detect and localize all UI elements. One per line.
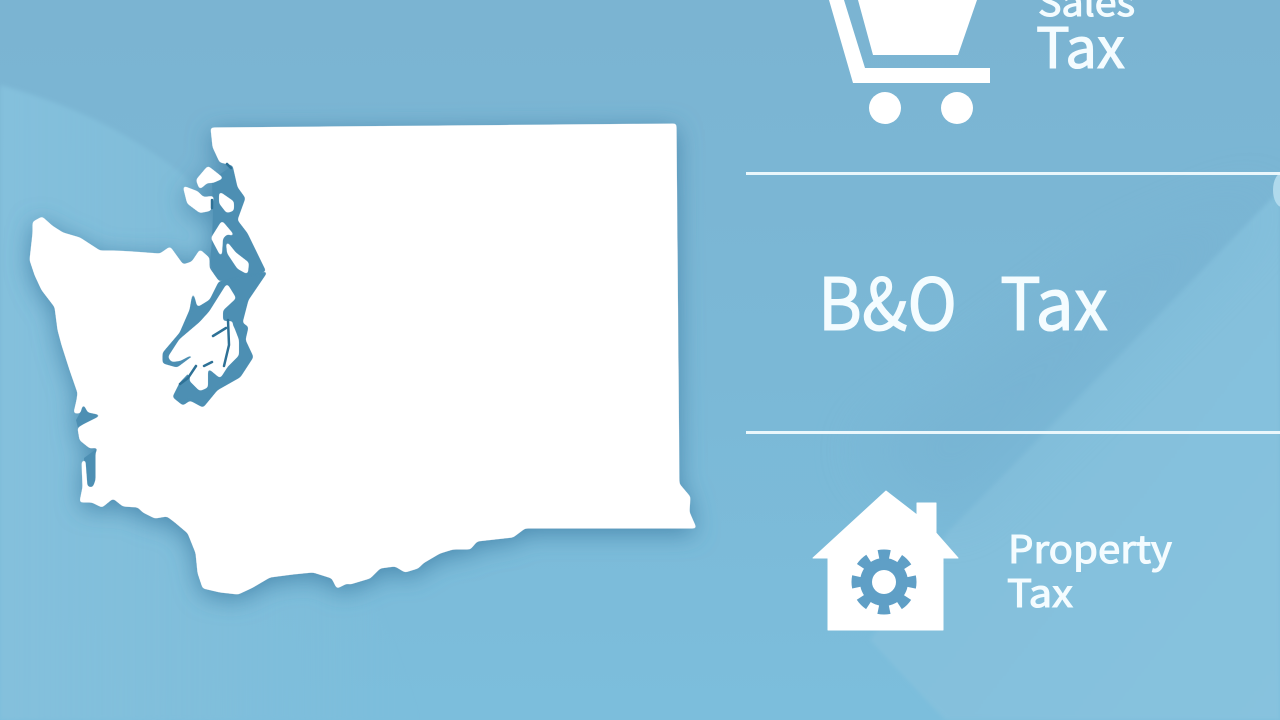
text: Sales Tax: Tax — [1036, 4, 1125, 85]
islands and peninsulas — [169, 167, 248, 390]
divider lines — [746, 172, 1280, 434]
text: B&O Tax: Tax — [1000, 246, 1108, 351]
text: Property Tax: Property — [1008, 519, 1172, 574]
water: Grays Harbor and Willapa Bay — [76, 402, 103, 490]
text: B&O Tax: B&O — [818, 246, 957, 351]
state silhouette — [30, 124, 696, 594]
icon: house with gear — [813, 491, 958, 630]
icon: shopping cart — [829, 0, 990, 124]
water: Puget Sound — [163, 272, 267, 407]
text: Property Tax: Tax — [1007, 563, 1073, 618]
right column: tax list — [746, 0, 1280, 630]
water: narrow inlets — [180, 164, 231, 384]
text: B&O Tax — [818, 246, 1108, 351]
water: northern sound — [210, 165, 267, 290]
map: Washington state — [30, 124, 696, 594]
text: Property Tax — [1007, 519, 1172, 618]
